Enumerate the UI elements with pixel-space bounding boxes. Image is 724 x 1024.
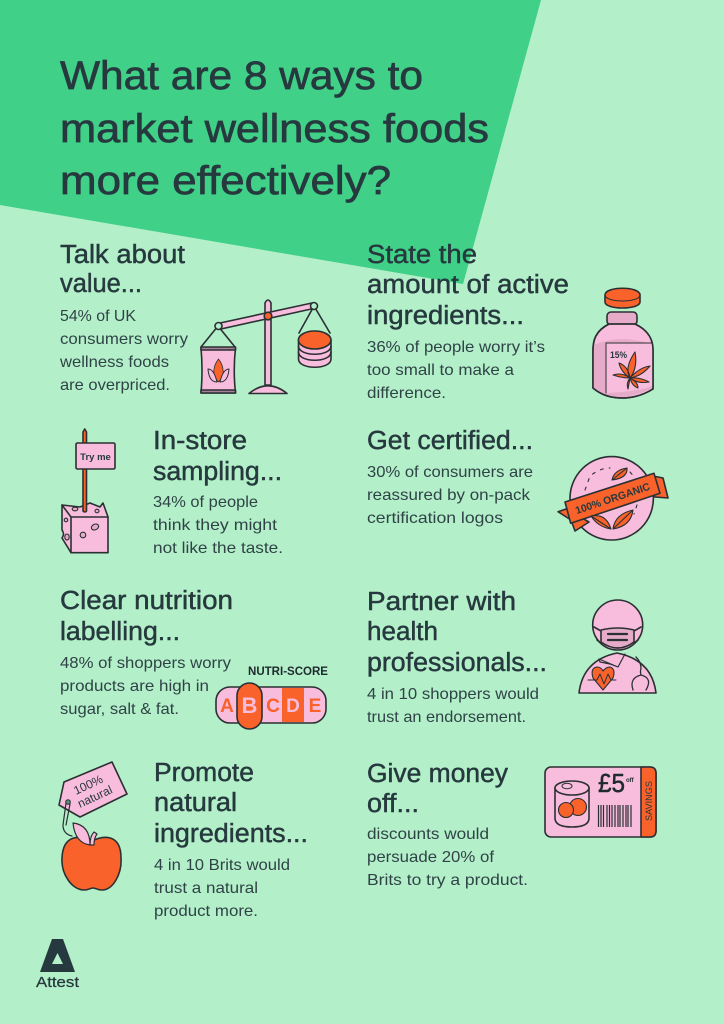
text block bbox=[367, 464, 533, 527]
text block: consumers worry bbox=[60, 331, 188, 348]
heading: professionals... bbox=[367, 649, 547, 677]
heading: Give money bbox=[367, 760, 508, 788]
text block: trust a natural bbox=[154, 880, 258, 897]
logo: Attest: Attest bbox=[36, 974, 80, 991]
heading bbox=[153, 427, 282, 486]
text block: Brits to try a product. bbox=[367, 872, 528, 889]
panel: get certified bbox=[367, 427, 668, 540]
heading bbox=[60, 587, 233, 646]
text block bbox=[367, 826, 528, 889]
heading: Clear nutrition bbox=[60, 587, 233, 615]
icon: apple with tag: 100% bbox=[71, 772, 105, 798]
heading: ingredients... bbox=[154, 820, 308, 848]
text block: sugar, salt & fat. bbox=[60, 701, 179, 718]
heading: sampling... bbox=[153, 458, 282, 486]
text block: not like the taste. bbox=[153, 540, 283, 557]
title: What are 8 ways to bbox=[60, 54, 423, 98]
heading: amount of active bbox=[367, 271, 569, 299]
heading: Partner with bbox=[367, 588, 516, 616]
text block: 54% of UK bbox=[60, 308, 137, 325]
icon: balance scale bbox=[201, 300, 331, 394]
panel: give money off bbox=[367, 760, 656, 889]
heading bbox=[367, 241, 569, 330]
heading: natural bbox=[154, 789, 237, 817]
heading bbox=[154, 759, 308, 848]
icon: cheese sample with sign bbox=[62, 429, 115, 553]
panel: promote natural ingredients bbox=[59, 759, 308, 920]
heading: Talk about bbox=[60, 241, 185, 269]
icon: nutri-score label: D bbox=[286, 696, 300, 717]
icon: apple with tag bbox=[59, 762, 127, 890]
panel: clear nutrition labelling bbox=[60, 587, 328, 729]
icon: cheese sample with sign: Try me bbox=[80, 452, 111, 463]
background green polygon bbox=[0, 0, 541, 284]
text block: 36% of people worry it’s bbox=[367, 339, 545, 356]
text block bbox=[59, 308, 188, 394]
title: more effectively? bbox=[60, 159, 391, 203]
icon: nutri-score label bbox=[216, 666, 328, 729]
heading bbox=[60, 241, 185, 298]
text block: products are high in bbox=[60, 678, 209, 695]
icon: organic certification badge: 100% ORGANIC bbox=[574, 481, 652, 517]
logo: Attest bbox=[36, 939, 80, 991]
title: market wellness foods bbox=[60, 107, 489, 151]
text block: 30% of consumers are bbox=[367, 464, 533, 481]
text block bbox=[60, 655, 231, 718]
text block: 4 in 10 Brits would bbox=[154, 857, 290, 874]
panel: in-store sampling bbox=[62, 427, 283, 557]
heading: off... bbox=[367, 790, 419, 818]
heading: labelling... bbox=[60, 618, 180, 646]
icon: nutri-score label: NUTRI-SCORE bbox=[248, 666, 328, 678]
icon: nutri-score label: B bbox=[242, 693, 257, 718]
heading: health bbox=[367, 618, 438, 646]
icon: savings coupon: off bbox=[626, 778, 635, 784]
text block: 34% of people bbox=[153, 494, 258, 511]
text block: 48% of shoppers worry bbox=[60, 655, 231, 672]
heading: ingredients... bbox=[367, 302, 524, 330]
icon: apple with tag: natural bbox=[75, 783, 115, 811]
text block: product more. bbox=[154, 903, 258, 920]
text block: too small to make a bbox=[367, 362, 514, 379]
title bbox=[60, 54, 489, 203]
panel: partner with health professionals bbox=[367, 588, 656, 726]
text block bbox=[153, 494, 283, 557]
text block: persuade 20% of bbox=[367, 849, 495, 866]
icon: organic certification badge bbox=[558, 457, 668, 540]
icon: savings coupon bbox=[545, 767, 656, 837]
text block bbox=[154, 857, 290, 920]
text block: certification logos bbox=[367, 510, 503, 527]
text block: 4 in 10 shoppers would bbox=[367, 686, 539, 703]
text block: reassured by on-pack bbox=[367, 487, 530, 504]
heading: State the bbox=[367, 241, 477, 269]
heading: Get certified... bbox=[367, 427, 533, 455]
text block: think they might bbox=[153, 517, 278, 534]
icon: savings coupon: £5 bbox=[598, 768, 625, 798]
heading: In-store bbox=[153, 427, 247, 455]
heading bbox=[367, 760, 508, 818]
panel: active ingredients bbox=[367, 241, 653, 402]
icon: nutri-score label: A bbox=[220, 696, 234, 717]
text block: difference. bbox=[367, 385, 446, 402]
icon: health professional bbox=[579, 600, 656, 693]
heading bbox=[367, 588, 547, 677]
text block bbox=[367, 339, 545, 402]
text block: wellness foods bbox=[59, 354, 169, 371]
icon: supplement bottle: 15% bbox=[610, 350, 627, 361]
icon: supplement bottle bbox=[593, 288, 653, 398]
heading: value... bbox=[60, 270, 142, 298]
panel: talk about value bbox=[59, 241, 331, 394]
icon: nutri-score label: C bbox=[266, 696, 280, 717]
text block: are overpriced. bbox=[60, 377, 170, 394]
icon: savings coupon: SAVINGS bbox=[644, 781, 655, 821]
icon: nutri-score label: E bbox=[309, 696, 321, 717]
text block: trust an endorsement. bbox=[367, 709, 526, 726]
heading: Promote bbox=[154, 759, 254, 787]
text block bbox=[367, 686, 539, 726]
text block: discounts would bbox=[367, 826, 489, 843]
